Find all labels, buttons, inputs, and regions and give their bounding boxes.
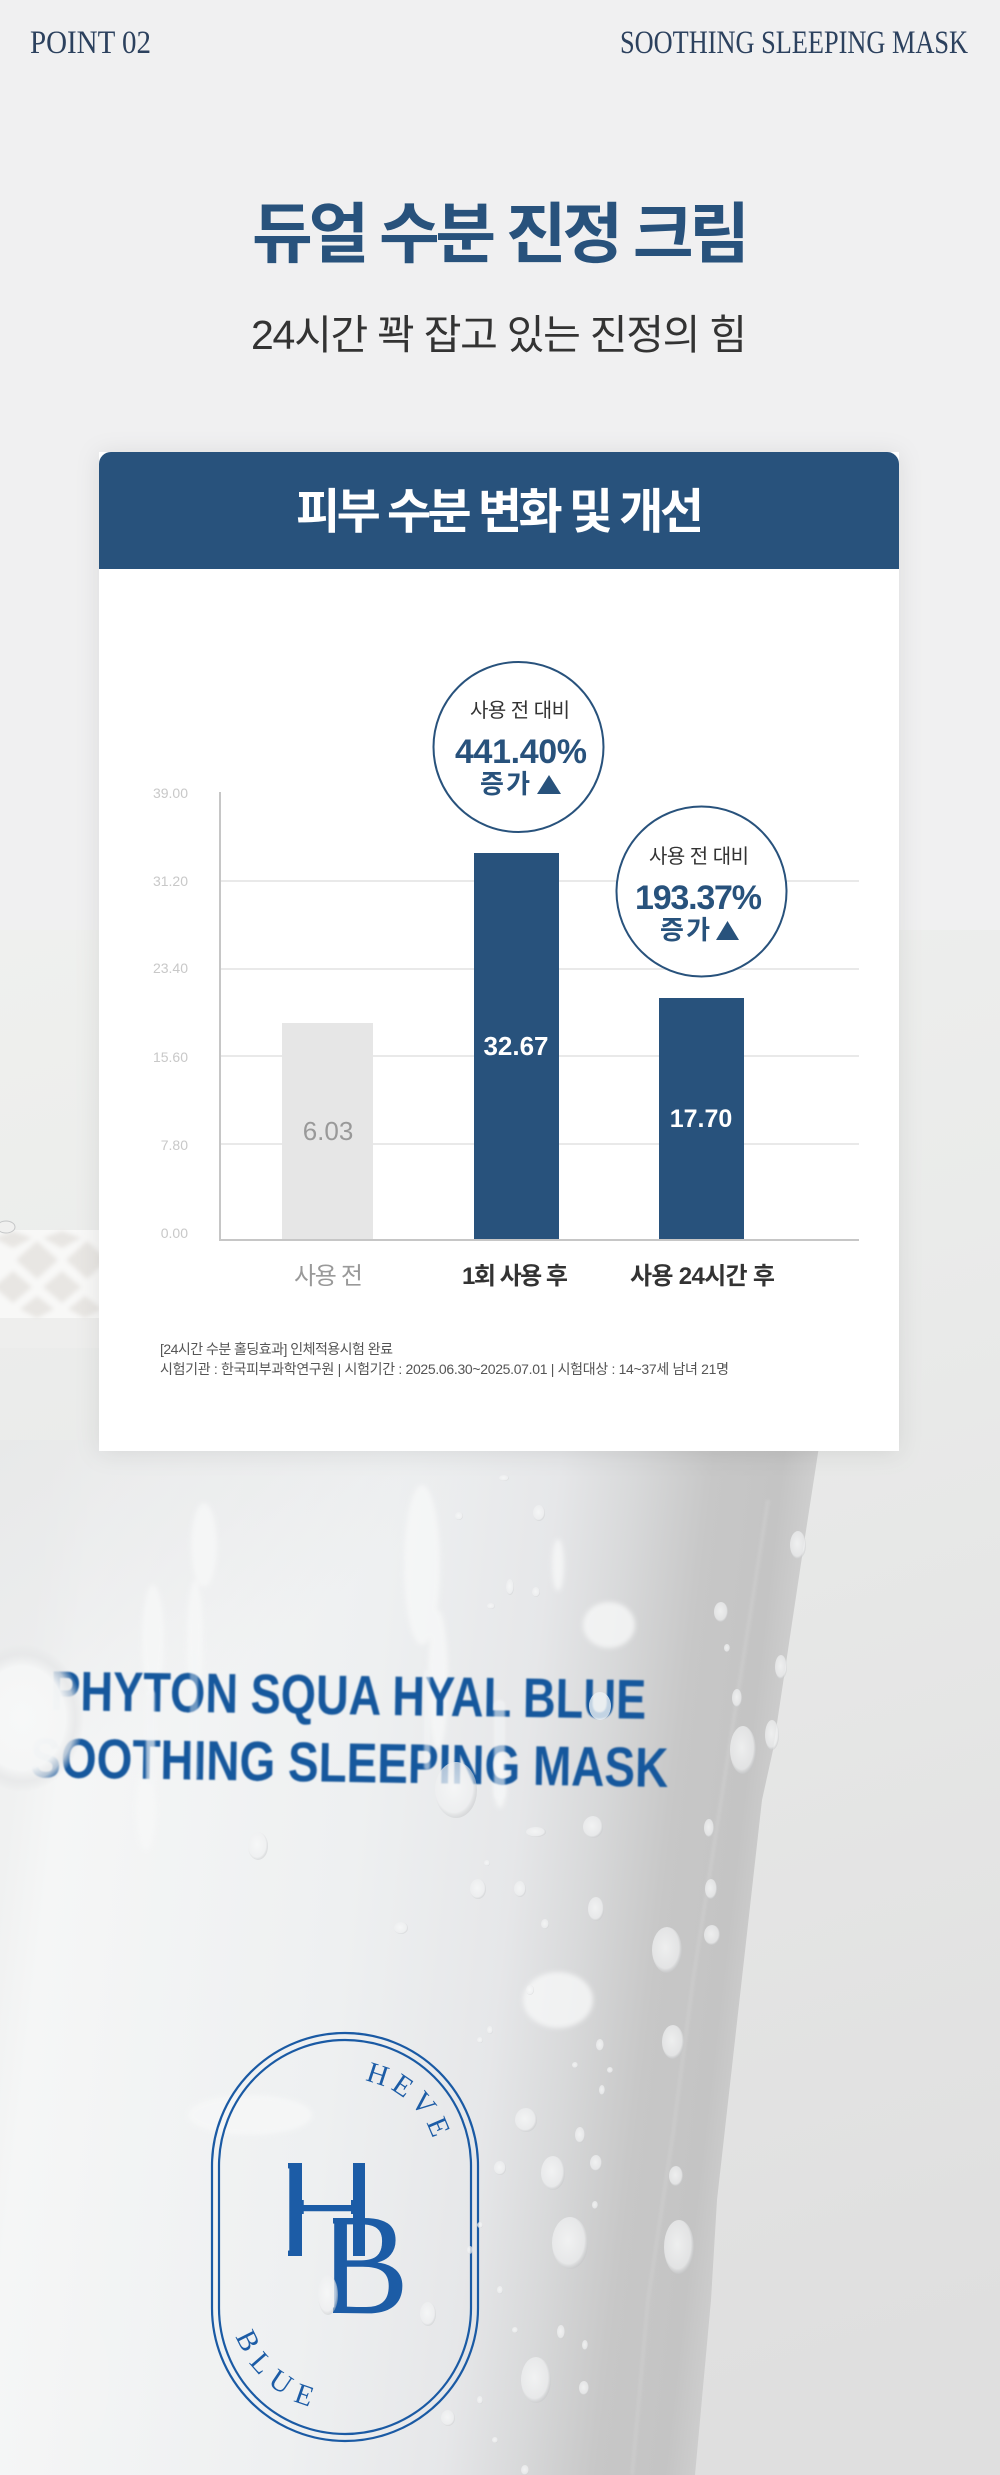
callout: 193.37% increase: 증가 — [660, 915, 710, 945]
callout: 441.40% increase: 증가 — [480, 769, 530, 799]
bar: 24 hours after use — [659, 998, 744, 1239]
subtitle: 24시간 꽉 잡고 있는 진정의 힘 — [251, 312, 747, 358]
y axis tick labels — [153, 785, 188, 1241]
logo: HEVE BLUE emblem: HEVE — [366, 2062, 450, 2137]
logo: HEVE BLUE emblem: BLUE — [236, 2328, 314, 2406]
card heading: 피부 수분 변화 및 개선 — [296, 486, 704, 539]
logo: HEVE BLUE emblem — [210, 2032, 480, 2442]
title: 듀얼 수분 진정 크림 — [252, 197, 750, 271]
bar: before use: 6.03 — [303, 1116, 353, 1146]
background: top plain area — [0, 0, 1000, 931]
callout: 193.37% increase — [616, 806, 786, 976]
logo: HEVE BLUE emblem: H — [272, 2129, 383, 2287]
y axis tick labels: 39.00 — [153, 785, 188, 801]
footnote: 시험기관 : 한국피부과학연구원 | 시험기간 : 2025.06.30~2025.07.01 | 시험대상 : 14~37세 남녀 21명 — [160, 1361, 729, 1377]
panel: moisture change chart card — [99, 452, 899, 1451]
icon: up triangle — [537, 775, 561, 794]
callout: 193.37% increase: 사용 전 대비 — [649, 845, 749, 868]
header label: POINT 02: POINT 02 — [30, 25, 151, 61]
icon: up triangle — [716, 921, 739, 940]
tube: printed product name — [30, 1659, 669, 1799]
tube: soft streaks of cream — [136, 1485, 635, 2135]
background: white quilted cap at left — [0, 1221, 108, 1348]
tube: large droplet at left — [0, 1644, 84, 1792]
callout: 441.40% increase: 441.40% — [455, 733, 587, 771]
bar chart — [153, 785, 859, 1290]
y axis tick labels: 7.80 — [161, 1137, 188, 1153]
callout: 193.37% increase: 193.37% — [635, 879, 762, 917]
tube: printed product name: PHYTON SQUA HYAL BLUE — [50, 1659, 647, 1731]
tube: water droplets — [77, 1475, 806, 2475]
callout: 441.40% increase — [434, 662, 604, 832]
chart grid lines — [220, 881, 859, 1144]
logo: HEVE BLUE emblem: B — [319, 2185, 409, 2345]
chart axes — [220, 792, 859, 1240]
x axis labels: 사용 24시간 후 — [630, 1263, 775, 1290]
tube: printed product name: SOOTHING SLEEPING MASK — [30, 1726, 669, 1799]
bar: before use — [282, 1023, 373, 1239]
y axis tick labels: 31.20 — [153, 873, 188, 889]
y axis tick labels: 15.60 — [153, 1049, 188, 1065]
x axis labels — [294, 1263, 775, 1290]
bar: 24 hours after use: 17.70 — [670, 1105, 732, 1133]
tube: water runs over printed text — [146, 1650, 611, 1818]
y axis tick labels: 23.40 — [153, 960, 188, 976]
card header bar — [99, 452, 899, 569]
bar: after one use: 32.67 — [483, 1031, 549, 1061]
x axis labels: 1회 사용 후 — [462, 1263, 568, 1290]
footnote — [160, 1341, 729, 1377]
card body — [99, 452, 899, 1451]
x axis labels: 사용 전 — [294, 1263, 363, 1290]
footnote: [24시간 수분 홀딩효과] 인체적용시험 완료 — [160, 1341, 393, 1357]
y axis tick labels: 0.00 — [161, 1225, 188, 1241]
tube: crease highlight — [632, 1500, 768, 2475]
callout: 441.40% increase: 사용 전 대비 — [470, 699, 570, 722]
tube body — [0, 1440, 820, 2475]
background photo: product tube on white surface — [0, 1220, 1000, 2475]
bar: after one use — [474, 853, 559, 1239]
